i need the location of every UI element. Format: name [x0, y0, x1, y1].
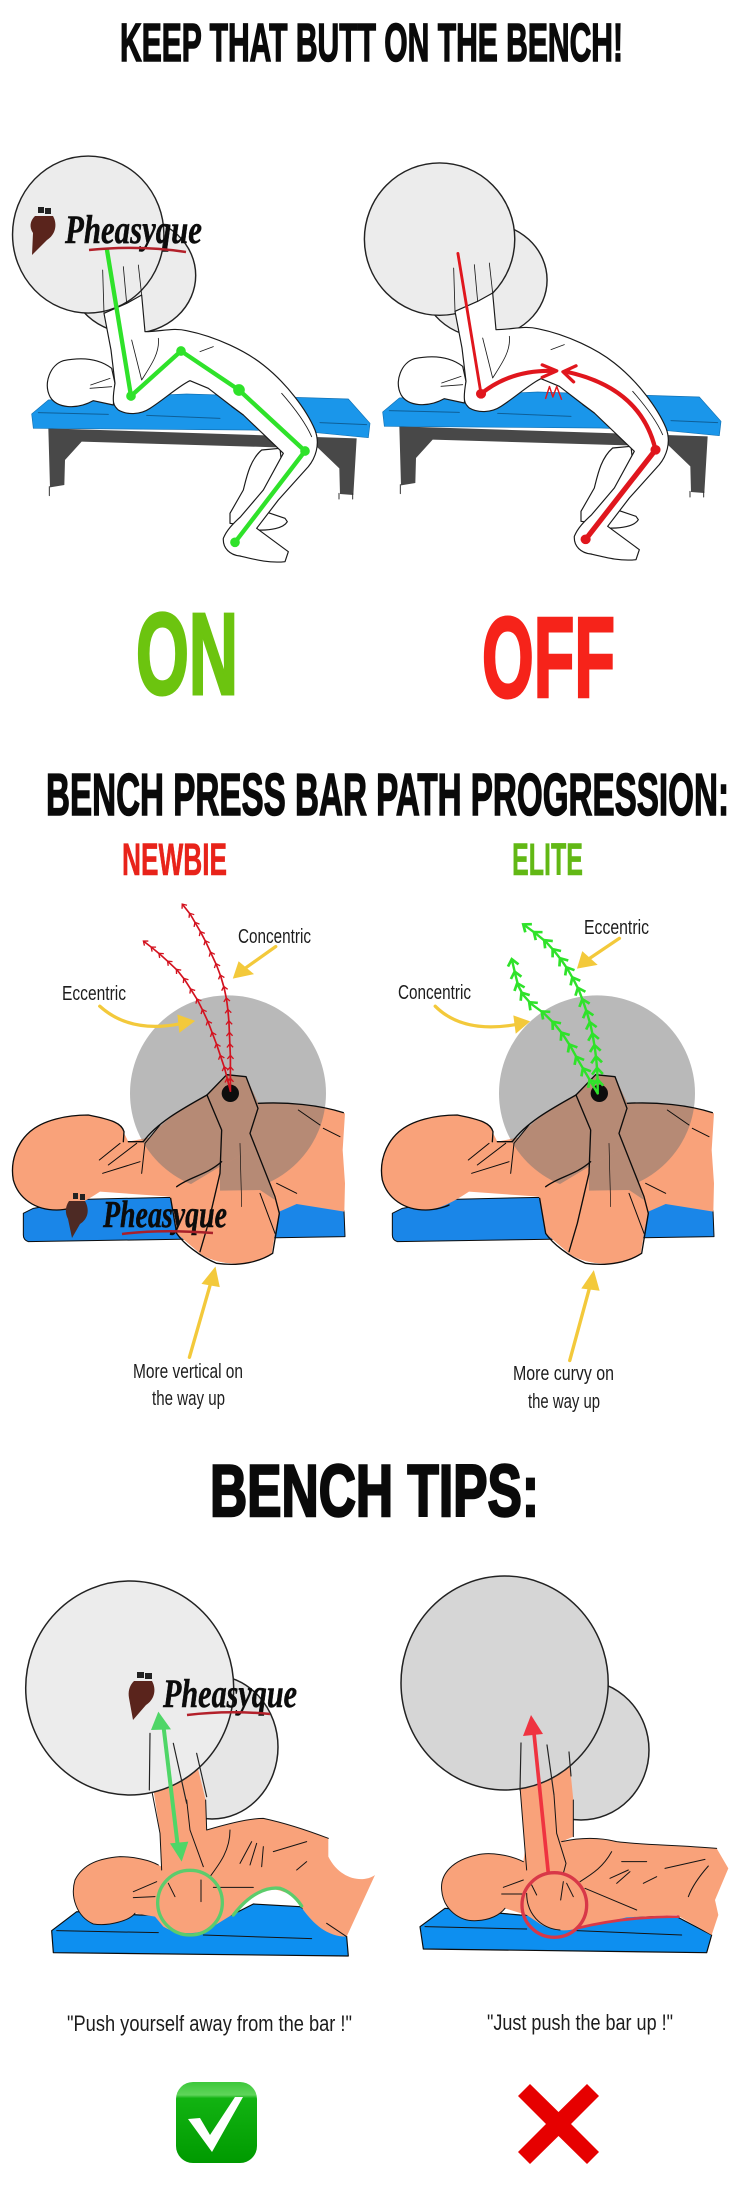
- arm lines, arrow and circle: [520, 1715, 678, 1937]
- icon: back weight plate: [146, 1675, 278, 1819]
- quote: just push the bar up: "Just push the bar up !": [487, 2010, 673, 2035]
- logo: pheasyque middle: [66, 1193, 227, 1238]
- bench and body: [32, 265, 370, 562]
- lifter, bench and plate: [381, 995, 714, 1264]
- eccentric path: [145, 942, 230, 1091]
- icon: green check: [176, 2082, 257, 2163]
- panel: good tip: [26, 1581, 375, 1956]
- note: more vertical: [133, 1361, 243, 1410]
- red flat back line: [577, 1917, 678, 1928]
- bench and lifter: [52, 1763, 375, 1956]
- red joint lines and arrows: [458, 253, 658, 542]
- label: elite: ELITE: [512, 834, 583, 885]
- yellow arrows: [435, 938, 619, 1361]
- label: eccentric newbie: Eccentric: [62, 983, 126, 1005]
- icon: front weight plate: [26, 1581, 234, 1795]
- title: bench tips: BENCH TIPS:: [210, 1451, 539, 1532]
- eccentric path: [525, 926, 598, 1093]
- green joint lines: [107, 250, 308, 545]
- icon: weight plates: [13, 156, 196, 333]
- logo: pheasyque middle: Pheasyque: [102, 1194, 227, 1236]
- bar paths and arrows: [435, 926, 619, 1361]
- panel: elite lifter: [381, 926, 714, 1361]
- red arrow: [523, 1715, 548, 1873]
- icon: weight plates: [364, 163, 547, 337]
- label: off: OFF: [482, 595, 615, 722]
- lifter, bench and plate: [12, 995, 345, 1264]
- green circle: [158, 1870, 222, 1935]
- label: concentric elite: Concentric: [398, 982, 471, 1004]
- note: more curvy: More curvy on: [513, 1363, 614, 1385]
- bar paths and arrows: [100, 905, 276, 1357]
- note: more curvy: [513, 1363, 614, 1413]
- logo: pheasyque bottom: [129, 1671, 297, 1720]
- red circle: [522, 1873, 587, 1937]
- icon: back weight plate: [513, 1680, 649, 1820]
- label: on: ON: [136, 589, 238, 719]
- note: more curvy: the way up: [528, 1391, 600, 1413]
- logo: pheasyque top: [31, 207, 202, 255]
- logo: pheasyque top: Pheasyque: [64, 207, 202, 252]
- concentric path: [512, 962, 598, 1093]
- bench and lifter: [420, 1767, 728, 1953]
- note: more vertical: More vertical on: [133, 1361, 243, 1383]
- green arch: [233, 1888, 302, 1915]
- quote: push yourself away: "Push yourself away from the bar !": [67, 2011, 352, 2036]
- label: newbie: NEWBIE: [122, 834, 227, 885]
- note: more vertical: the way up: [152, 1388, 225, 1410]
- panel: newbie lifter: [12, 905, 345, 1357]
- logo: pheasyque bottom: Pheasyque: [162, 1671, 297, 1716]
- panel: bad tip: [401, 1576, 728, 1953]
- arm lines, arrow and circle: [149, 1712, 302, 1935]
- bench and body: [383, 263, 721, 560]
- panel: butt off bench figure: [364, 163, 721, 560]
- label: eccentric elite: Eccentric: [584, 917, 649, 939]
- concentric path: [183, 905, 230, 1091]
- label: concentric newbie: Concentric: [238, 926, 311, 948]
- panel: butt on bench figure: [13, 156, 370, 562]
- icon: red cross: [518, 2084, 599, 2164]
- green double arrow: [151, 1712, 188, 1862]
- icon: front weight plate: [401, 1576, 608, 1790]
- yellow arrows: [100, 947, 276, 1357]
